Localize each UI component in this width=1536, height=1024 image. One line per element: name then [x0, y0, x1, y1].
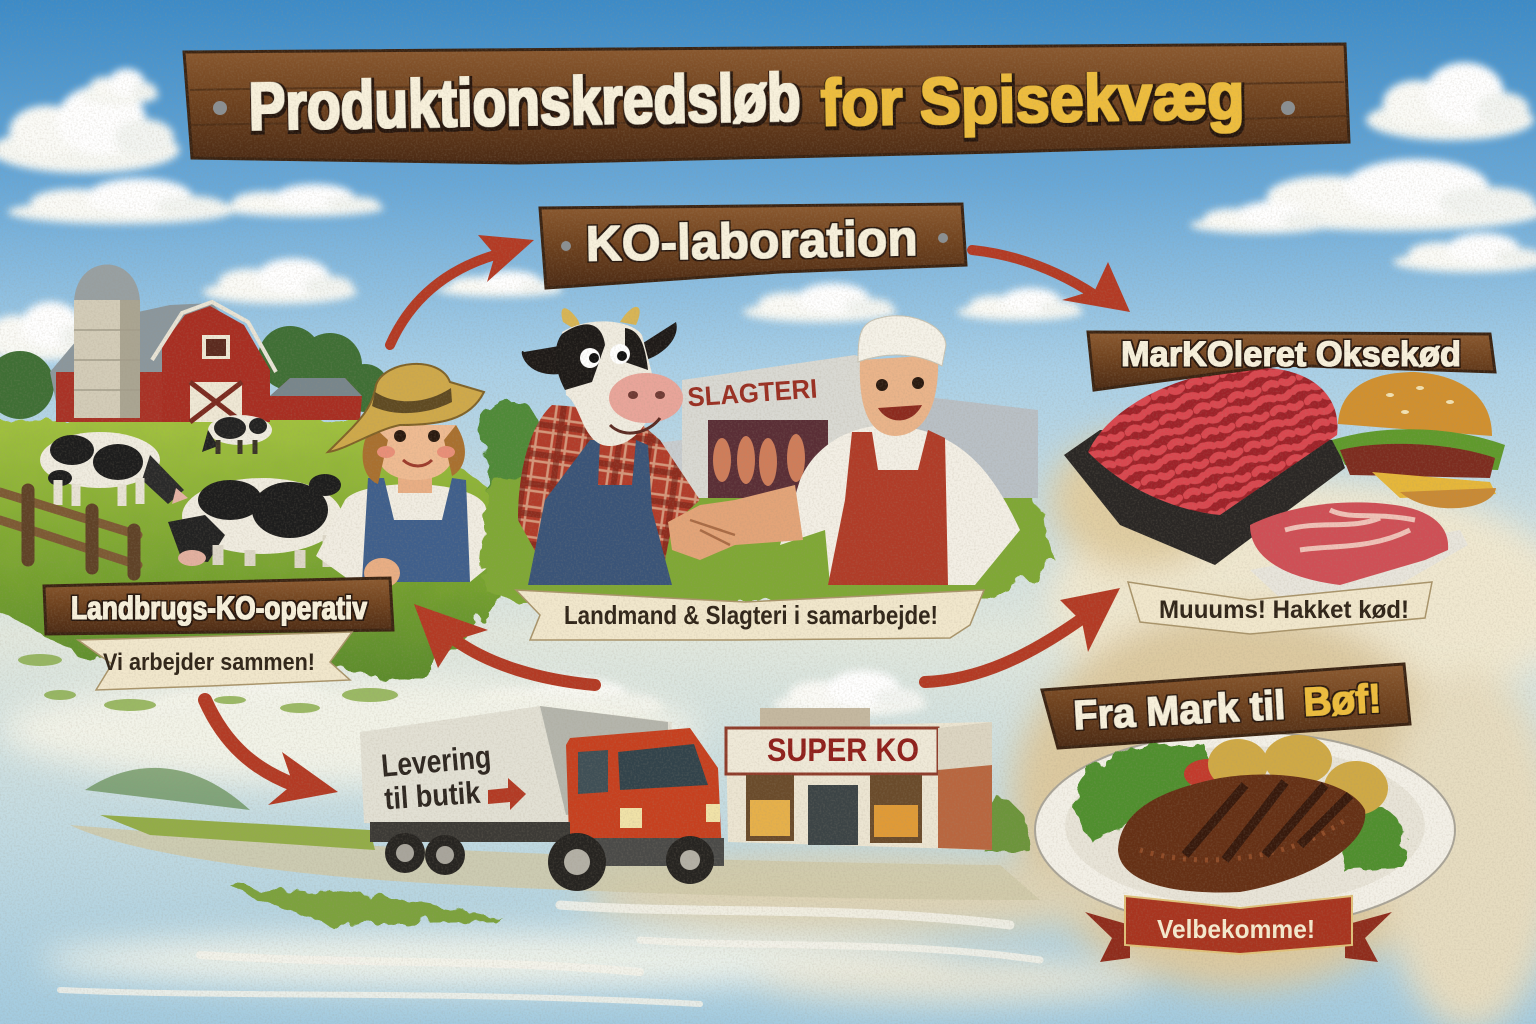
slaughterhouse building — [640, 355, 1038, 498]
treeline — [0, 326, 389, 419]
banner: Muuums! Hakket kød!: Muuums! Hakket kød! — [1159, 596, 1409, 624]
scene meadow — [480, 470, 1055, 605]
potatoes — [1208, 735, 1388, 815]
sign: MarKOleret Oksekød — [1088, 332, 1495, 390]
title text: Produktionskredsløb — [248, 59, 801, 145]
store sign: SUPER KO — [767, 732, 919, 768]
icon: raw steak — [1250, 502, 1468, 598]
hand — [364, 558, 400, 588]
title sign: for Spisekvæg — [820, 58, 1245, 140]
banner: Landmand og Slagteri i samarbejde — [516, 590, 984, 640]
banner: Muuums! Hakket kød! — [1128, 582, 1432, 634]
farmer shirt — [316, 484, 503, 582]
road streaks — [60, 905, 1040, 1004]
icon: cow front — [168, 474, 342, 568]
icon: minced meat — [1088, 368, 1338, 515]
butcher — [780, 316, 1020, 585]
clouds — [0, 62, 1536, 728]
sign: KO-laboration — [540, 204, 966, 288]
road — [70, 825, 1040, 900]
arrow: farm to KO-laboration — [390, 235, 534, 345]
bush by store — [985, 798, 1030, 852]
title sign — [184, 44, 1349, 163]
plate — [1035, 732, 1455, 928]
cow farmer — [518, 307, 700, 585]
grilled steak — [1118, 775, 1365, 893]
arrows: production cycle — [205, 235, 1130, 805]
head — [860, 355, 938, 436]
panel: steak plate — [1035, 732, 1455, 928]
panel: delivery and store — [70, 706, 1040, 925]
icon: truck arrow — [488, 778, 526, 810]
arrow: back to farm — [414, 604, 595, 685]
farm meadow — [0, 415, 520, 685]
tree beside farmer — [480, 399, 546, 506]
sign: Fra Mark til Bøf!: Bøf! — [1302, 675, 1382, 725]
icon: burger — [1332, 372, 1505, 508]
truck label: Levering — [380, 738, 492, 784]
sign: Fra Mark til Bøf!: Fra Mark til — [1072, 682, 1286, 739]
salad right — [1340, 803, 1404, 868]
overalls — [528, 440, 672, 585]
icon: cow grazing back — [202, 415, 272, 454]
nails — [213, 101, 227, 115]
truck label — [380, 738, 492, 816]
handshake — [668, 485, 803, 560]
pale lower landscape wash — [0, 430, 1536, 1024]
panel: KO-laboration handshake scene — [480, 307, 1055, 605]
arrow: delivery to meat — [925, 588, 1120, 682]
straw hat — [328, 364, 484, 452]
sign: Fra Mark til Bøf! — [1042, 664, 1410, 748]
truck — [360, 706, 724, 891]
building sign: SLAGTERI: SLAGTERI — [686, 374, 818, 413]
ribbon: Velbekomme!: Velbekomme! — [1157, 914, 1315, 944]
truck label: til butik — [383, 775, 482, 816]
icon: black tray — [1064, 430, 1345, 565]
panel: meat products — [1064, 368, 1505, 598]
plaid shirt — [518, 405, 700, 585]
sign: Landbrugs-KO-operativ: Landbrugs-KO-operativ — [71, 590, 367, 626]
icon: red barn — [50, 302, 276, 422]
banner: Vi arbejder sammen!: Vi arbejder sammen! — [103, 649, 315, 676]
panel: woman farmer — [316, 364, 503, 588]
scattered grass tufts — [18, 654, 398, 713]
icon: small barn — [270, 378, 362, 420]
tomato — [1184, 759, 1232, 789]
banner: Vi arbejder sammen! — [78, 632, 352, 690]
store — [726, 708, 992, 850]
arrow: farm to truck — [205, 700, 338, 805]
icon: cow left — [40, 432, 188, 506]
panel: farm scene — [0, 264, 546, 713]
grass strip — [100, 815, 375, 850]
arrow: KO-laboration to meat — [972, 250, 1130, 312]
icon: fence — [0, 490, 138, 574]
neck and face — [398, 465, 432, 493]
sign: Landbrugs-KO-operativ — [44, 578, 393, 634]
salad left — [1075, 743, 1209, 840]
cow head — [522, 307, 683, 446]
sign: MarKOleret Oksekød: MarKOleret Oksekød — [1121, 335, 1461, 374]
overalls — [362, 478, 470, 582]
banner: Landmand og Slagteri i samarbejde: Landmand & Slagteri i samarbejde! — [564, 600, 938, 630]
ribbon: Velbekomme! — [1085, 896, 1392, 962]
white cap — [858, 316, 946, 366]
sign: KO-laboration: KO-laboration — [585, 210, 918, 272]
apron — [828, 430, 948, 585]
icon: silo — [74, 264, 140, 418]
